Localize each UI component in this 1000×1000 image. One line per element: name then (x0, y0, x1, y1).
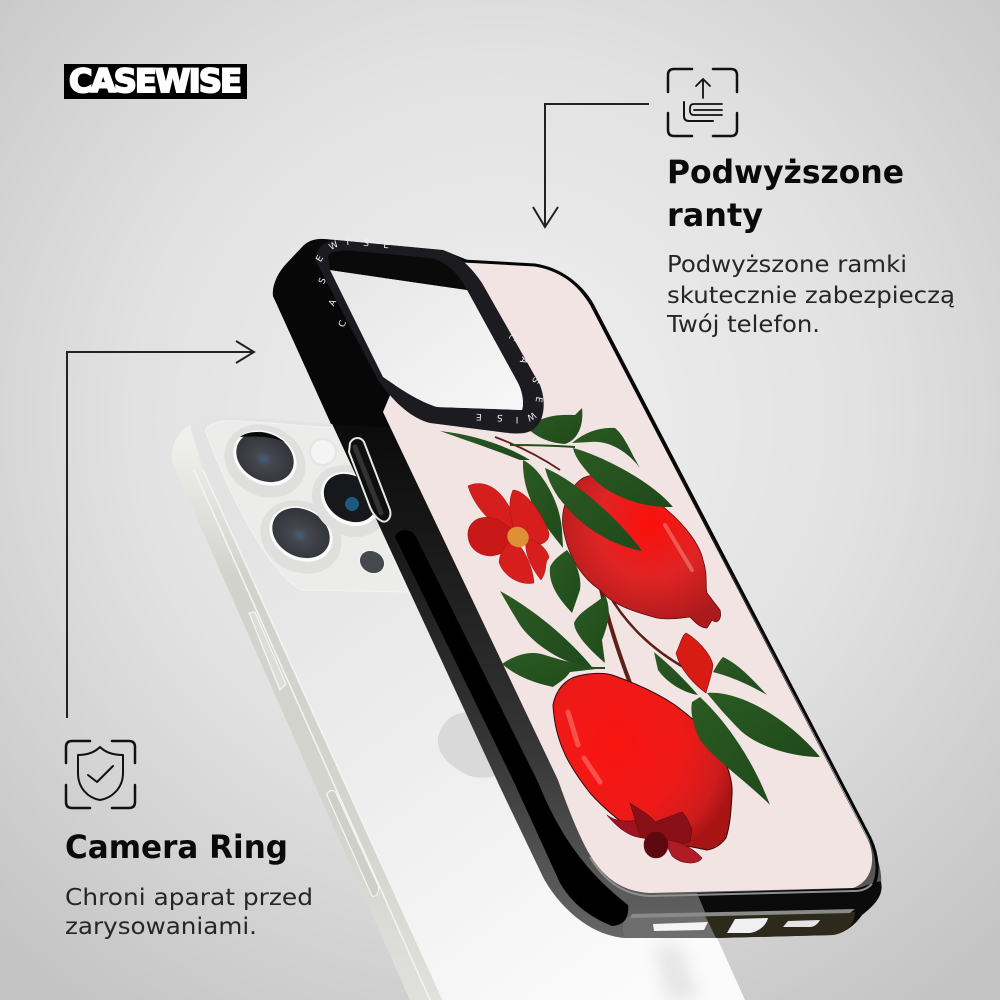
ring text: A (327, 297, 339, 308)
ring frame (316, 240, 544, 433)
case bottom right section (697, 882, 882, 938)
text: camera ring description (65, 885, 313, 940)
phone side band (172, 425, 443, 1000)
ring text: E (475, 411, 482, 421)
ring text: E (532, 396, 543, 403)
shadow on phone (655, 945, 700, 1000)
ring text: S (529, 375, 541, 385)
ring text: C (337, 319, 349, 329)
bud (676, 633, 713, 693)
arrow: top callout (533, 104, 649, 227)
lidar sensor (355, 546, 389, 578)
ring text: S (496, 412, 503, 422)
ring text: E (383, 241, 390, 251)
ring inner wall (328, 251, 467, 290)
case top black section (273, 245, 400, 428)
text: raised edges description: Podwyższone ramki (667, 252, 907, 278)
ring text: S (363, 239, 370, 249)
leaves (440, 408, 820, 805)
port left (653, 922, 708, 931)
arrow: left callout (67, 341, 254, 718)
lower pomegranate (553, 673, 732, 850)
side inner stripe (395, 530, 628, 926)
ring text (315, 238, 543, 424)
ring text: W (328, 240, 340, 253)
heading: camera ring: Camera Ring (65, 828, 288, 866)
icon: raised edges (668, 69, 737, 136)
side button (349, 438, 390, 522)
side band highlight (194, 470, 443, 1000)
flower (468, 484, 549, 584)
case rim (463, 261, 877, 888)
text: raised edges description (666, 252, 955, 338)
pomegranate illustration (440, 408, 820, 863)
upper fruit highlight (665, 525, 692, 570)
heading: raised edges: ranty (667, 196, 763, 234)
icon: shield (66, 741, 135, 808)
case body (273, 239, 881, 938)
ring text: I (346, 238, 350, 248)
text: camera ring description: zarysowaniami. (65, 914, 257, 940)
ring text: W (525, 409, 537, 422)
phone case (273, 239, 882, 938)
text: raised edges description: Twój telefon. (666, 312, 820, 338)
bottom highlight strip (630, 909, 855, 918)
phone back (172, 416, 745, 1000)
camera plateau (205, 421, 408, 592)
ring text: I (516, 414, 518, 424)
lens top (211, 410, 319, 512)
ring text: S (317, 276, 329, 286)
upper pomegranate (563, 475, 721, 628)
port right (783, 920, 820, 927)
ring text: E (315, 254, 326, 264)
apple logo (438, 712, 515, 778)
lens bottom (247, 486, 355, 588)
logo: CASEWISE (69, 62, 242, 100)
white phone (172, 410, 745, 1000)
lens right (298, 450, 402, 552)
heading: raised edges (667, 153, 904, 234)
calyx (607, 803, 702, 863)
heading: raised edges: Podwyższone (667, 153, 904, 191)
case screen artwork (383, 262, 872, 893)
text: camera ring description: Chroni aparat przed (65, 885, 313, 911)
bottom face (705, 912, 855, 938)
text: raised edges description: skutecznie zabezpieczą (667, 283, 955, 309)
lower fruit highlights (568, 712, 600, 782)
bottom face transparent (623, 914, 716, 938)
ring text: C (506, 332, 518, 342)
camera ring (315, 238, 544, 433)
ring text: A (517, 355, 529, 366)
side buttons (249, 612, 379, 896)
inner rim bottom (590, 857, 872, 896)
ring window (330, 270, 523, 410)
port centre (727, 918, 768, 933)
flash (310, 439, 336, 465)
branches (495, 437, 685, 683)
